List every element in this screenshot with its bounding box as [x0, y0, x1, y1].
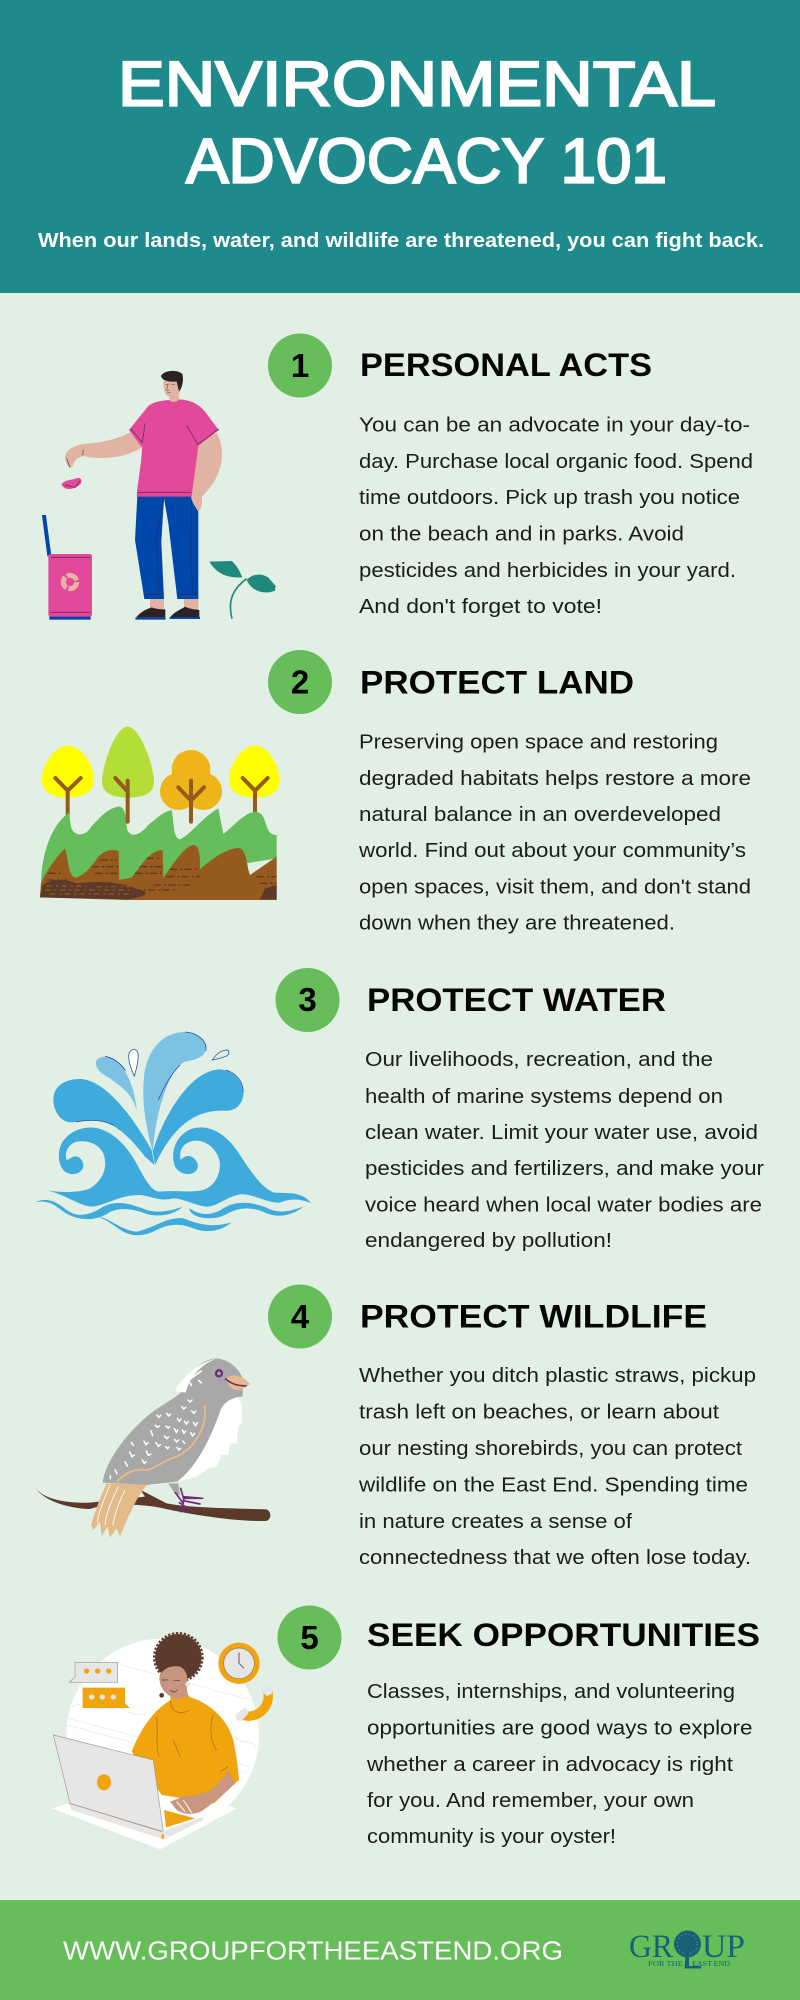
body text: world. Find out about your community’s	[358, 840, 746, 862]
title: ENVIRONMENTAL	[118, 50, 716, 120]
number badge 3	[276, 968, 340, 1032]
panel: personal acts	[43, 334, 753, 620]
number badge 4	[268, 1284, 332, 1348]
body text	[358, 1365, 756, 1569]
body text	[358, 732, 751, 934]
icon: bird on branch	[36, 1358, 270, 1537]
number badge 4: 4	[291, 1298, 310, 1335]
body text: endangered by pollution!	[365, 1230, 612, 1252]
panel: seek opportunities	[52, 1606, 760, 1849]
logo: Group for the East End: EAST END	[692, 1960, 730, 1968]
body text: Our livelihoods, recreation, and the	[365, 1049, 713, 1071]
website url: WWW.GROUPFORTHEEASTEND.ORG	[63, 1936, 563, 1966]
number badge 3: 3	[298, 981, 317, 1018]
header banner	[0, 0, 800, 293]
body text: wildlife on the East End. Spending time	[358, 1474, 748, 1496]
body text: pesticides and herbicides in your yard.	[359, 560, 736, 582]
body text: down when they are threatened.	[359, 912, 675, 934]
body text: You can be an advocate in your day-to-	[359, 414, 750, 436]
heading: PROTECT WILDLIFE	[360, 1298, 707, 1334]
icon: water splash and waves	[35, 1032, 312, 1235]
heading: PERSONAL ACTS	[360, 347, 652, 383]
body text: our nesting shorebirds, you can protect	[359, 1438, 742, 1460]
panel: protect wildlife	[36, 1284, 756, 1569]
icon: person dropping trash in recycling bin	[43, 371, 276, 620]
body text: community is your oyster!	[367, 1826, 616, 1848]
panel: protect water	[35, 968, 764, 1252]
body text: open spaces, visit them, and don't stand	[359, 876, 751, 898]
title	[118, 50, 716, 196]
body text: health of marine systems depend on	[365, 1086, 723, 1108]
icon: trees on hills	[40, 727, 279, 900]
logo: Group for the East End	[629, 1929, 745, 1968]
body text: degraded habitats helps restore a more	[359, 768, 751, 790]
body text: And don't forget to vote!	[359, 596, 602, 618]
body text: voice heard when local water bodies are	[365, 1194, 762, 1216]
number badge 2	[268, 650, 332, 714]
body text: opportunities are good ways to explore	[367, 1718, 752, 1740]
body text: for you. And remember, your own	[367, 1790, 694, 1812]
body text: whether a career in advocacy is right	[366, 1754, 733, 1776]
panel: protect land	[40, 650, 751, 934]
body text: Classes, internships, and volunteering	[367, 1681, 735, 1703]
heading: SEEK OPPORTUNITIES	[367, 1617, 760, 1653]
body text: connectedness that we often lose today.	[359, 1547, 751, 1569]
logo: Group for the East End: GR	[629, 1929, 673, 1965]
icon: woman working on a laptop	[52, 1633, 272, 1849]
number badge 1	[268, 334, 332, 398]
body text	[359, 414, 753, 618]
body text: time outdoors. Pick up trash you notice	[359, 487, 740, 509]
logo: Group for the East End: FOR THE	[648, 1960, 683, 1968]
body text: Preserving open space and restoring	[359, 732, 718, 754]
body text: pesticides and fertilizers, and make your	[365, 1158, 764, 1180]
body text	[365, 1049, 764, 1252]
body text: in nature creates a sense of	[359, 1511, 632, 1533]
body text	[366, 1681, 752, 1848]
footer banner	[0, 1900, 800, 2000]
body text: Whether you ditch plastic straws, pickup	[359, 1365, 756, 1387]
heading: PROTECT WATER	[367, 982, 666, 1018]
body text: clean water. Limit your water use, avoid	[365, 1122, 758, 1144]
body text: on the beach and in parks. Avoid	[359, 524, 684, 546]
logo: Group for the East End: UP	[702, 1929, 745, 1965]
body text: day. Purchase local organic food. Spend	[359, 451, 753, 473]
number badge 2: 2	[291, 664, 309, 700]
title: ADVOCACY 101	[186, 126, 667, 196]
body text: natural balance in an overdeveloped	[359, 804, 721, 826]
number badge 5: 5	[300, 1619, 319, 1656]
subtitle: When our lands, water, and wildlife are threatened, you can fight back.	[38, 230, 764, 252]
number badge 1: 1	[291, 347, 309, 384]
heading: PROTECT LAND	[360, 664, 634, 700]
body text: trash left on beaches, or learn about	[359, 1402, 719, 1424]
number badge 5	[278, 1606, 342, 1670]
